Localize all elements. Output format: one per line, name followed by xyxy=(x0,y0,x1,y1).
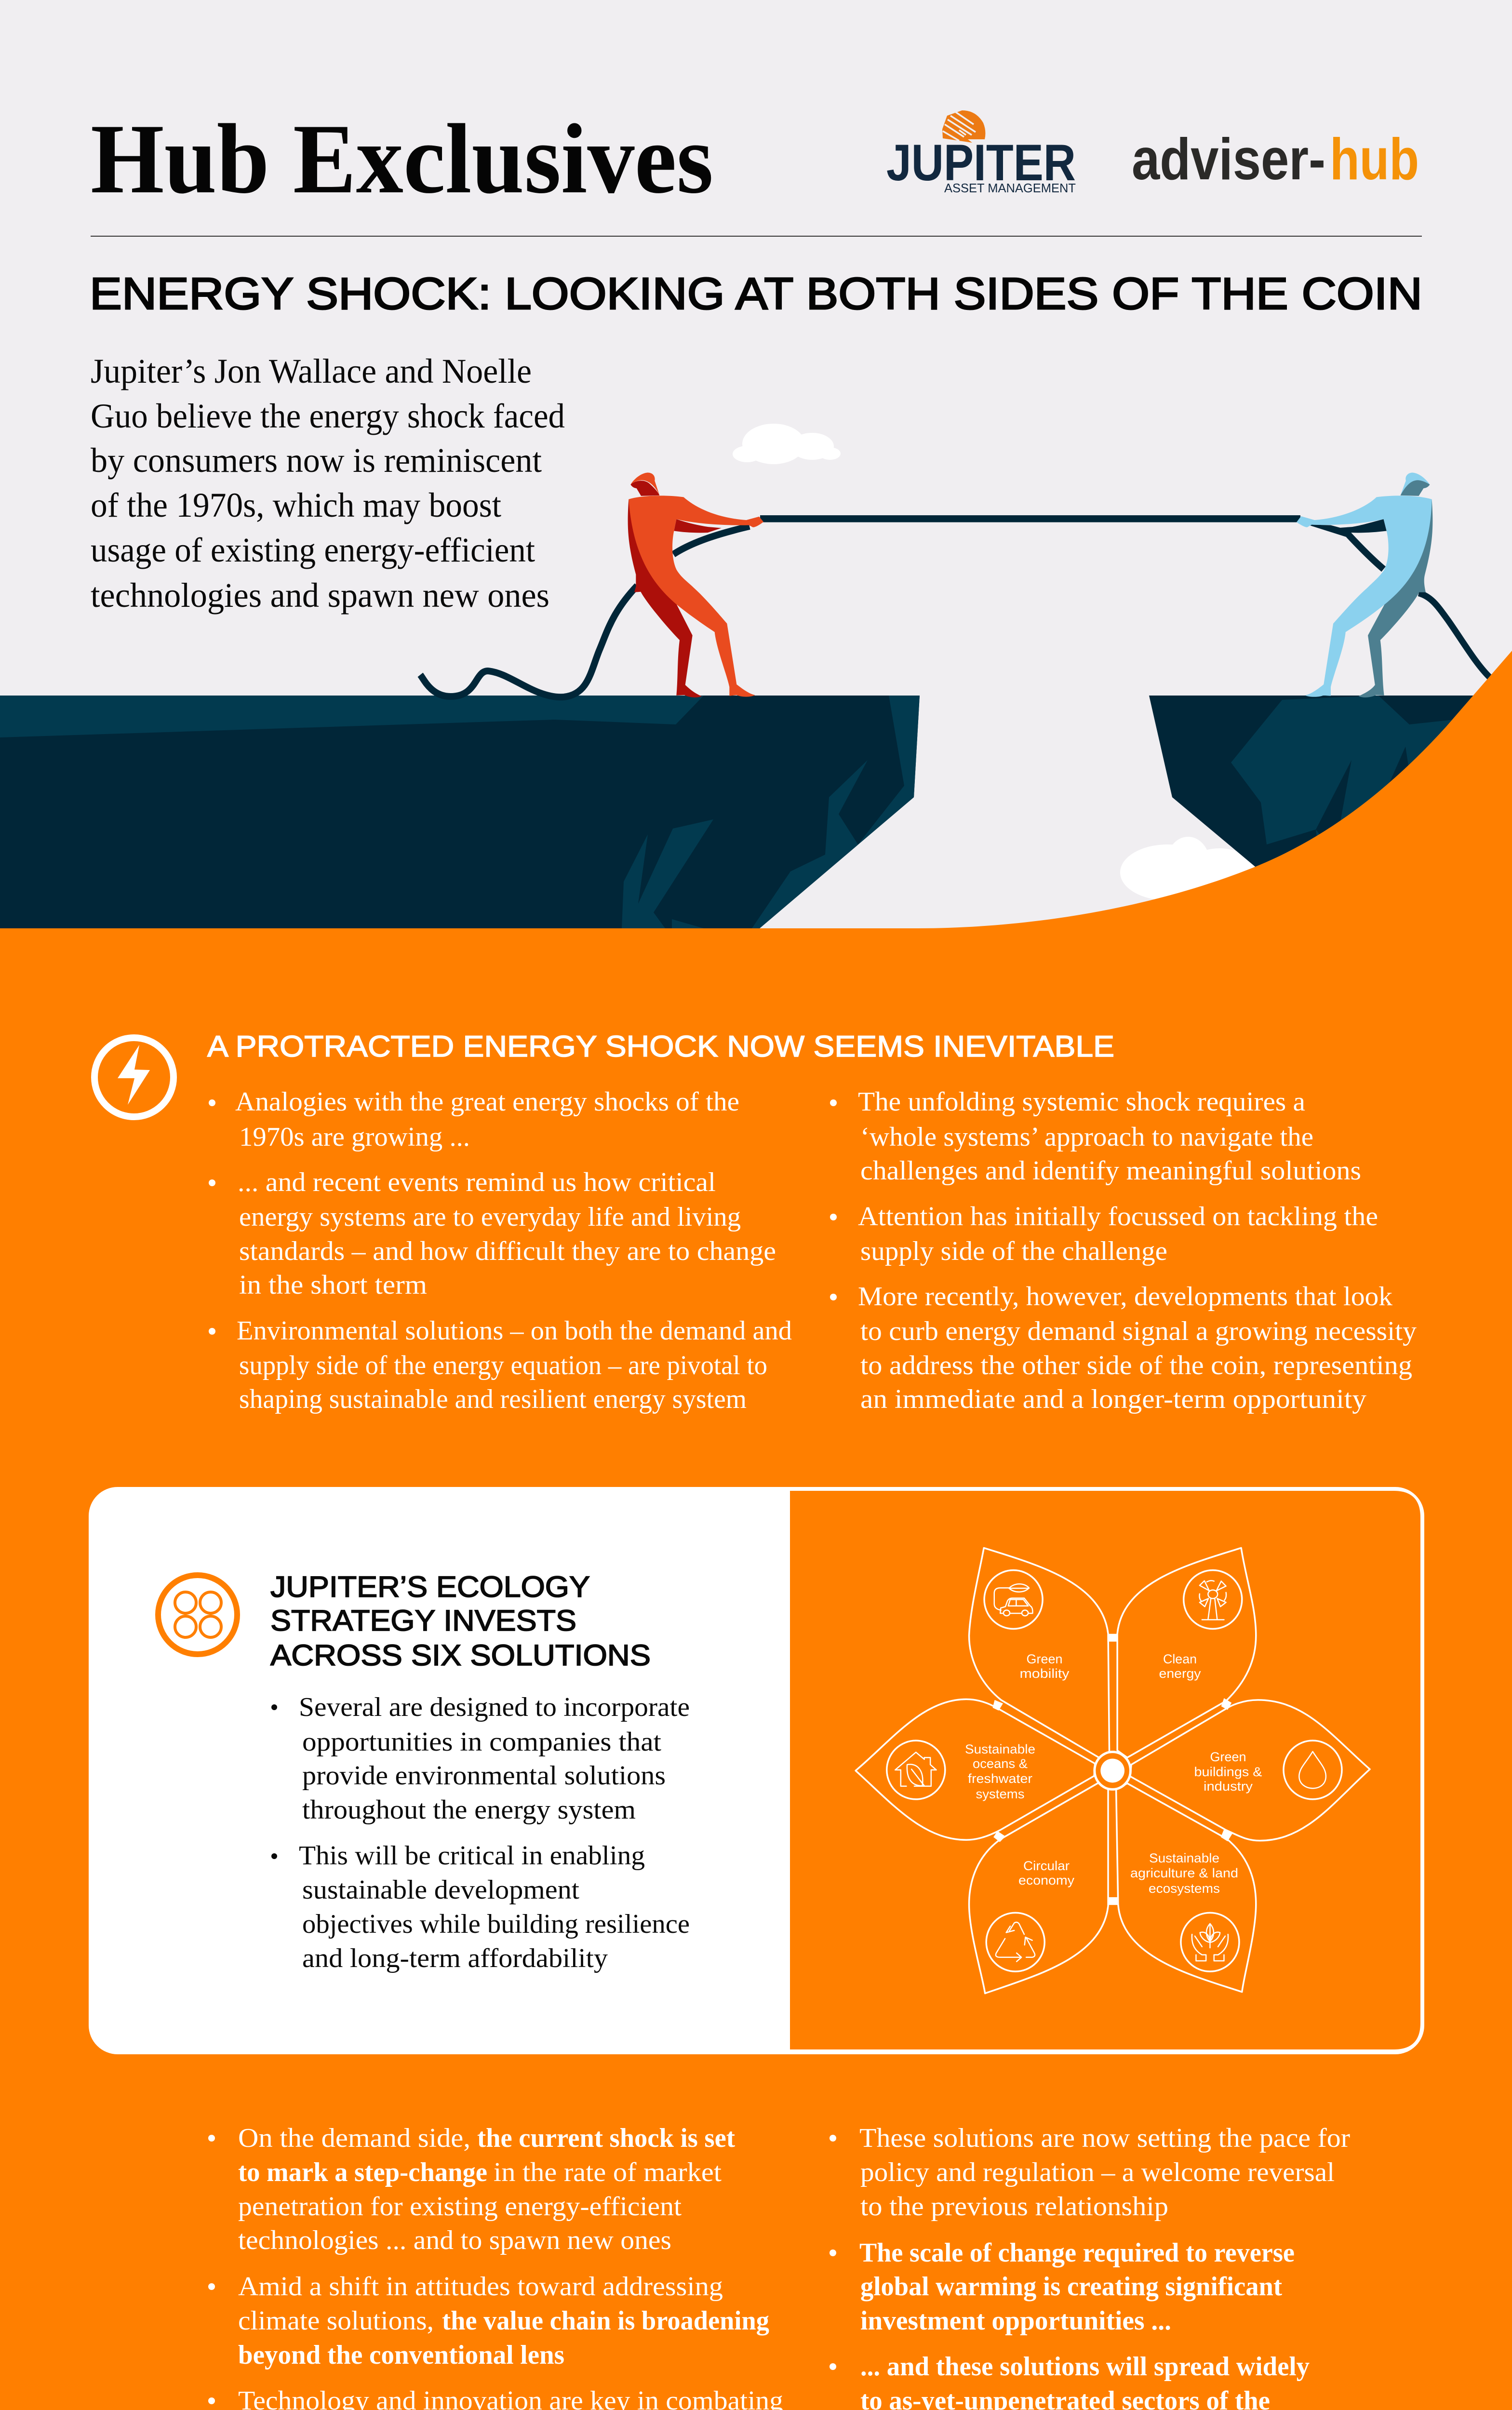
right bullet list: supply side of the challenge xyxy=(860,1236,1167,1266)
section heading: A PROTRACTED ENERGY SHOCK NOW SEEMS INEVITABLE xyxy=(207,1030,1114,1063)
right bullet list: to curb energy demand signal a growing necessity xyxy=(860,1316,1417,1346)
left bullet list: On the demand side, xyxy=(238,2123,470,2153)
intro text: usage of existing energy-efficient xyxy=(91,531,535,569)
label: sustainable oceans and freshwater systems: Sustainable xyxy=(965,1742,1035,1756)
label: circular economy: Circular xyxy=(1023,1859,1070,1873)
right cliff xyxy=(1149,696,1512,892)
icon: water drop xyxy=(1299,1752,1326,1788)
intro text: by consumers now is reminiscent xyxy=(91,441,542,480)
label: green mobility xyxy=(1020,1652,1070,1681)
label: sustainable oceans and freshwater systems: freshwater xyxy=(968,1771,1032,1786)
left cliff xyxy=(0,696,920,928)
label: green buildings and industry: Green xyxy=(1210,1750,1246,1764)
intro text xyxy=(91,352,565,615)
left bullet list: shaping sustainable and resilient energy system xyxy=(239,1384,747,1414)
icon: house with leaf xyxy=(895,1752,937,1786)
left bullet list: Environmental solutions – on both the demand and xyxy=(237,1316,792,1346)
card heading: JUPITER’S ECOLOGY xyxy=(270,1570,590,1603)
left bullet list: to mark a step-change xyxy=(238,2157,487,2187)
label: clean energy xyxy=(1159,1652,1201,1681)
label: green mobility: mobility xyxy=(1020,1666,1070,1681)
icon: wind turbine xyxy=(1199,1580,1226,1620)
panel: protracted energy shock xyxy=(94,1030,1417,1414)
left bullet list: 1970s are growing ... xyxy=(239,1122,470,1152)
card bullet list: opportunities in companies that xyxy=(302,1727,661,1757)
right bullet list: The scale of change required to reverse xyxy=(859,2238,1295,2268)
label: green mobility: Green xyxy=(1027,1652,1062,1666)
right bullet list: The unfolding systemic shock requires a xyxy=(858,1087,1305,1117)
intro text: Guo believe the energy shock faced xyxy=(91,397,565,435)
figure: left, orange xyxy=(628,473,763,697)
right bullet list: ... and these solutions will spread widely xyxy=(860,2352,1310,2382)
intro text: technologies and spawn new ones xyxy=(91,576,549,615)
left bullet list: Analogies with the great energy shocks of the xyxy=(235,1087,739,1117)
icon: recycle triangle xyxy=(996,1922,1035,1962)
left bullet list: in the rate of market xyxy=(494,2157,722,2187)
label: clean energy: Clean xyxy=(1163,1652,1197,1666)
panel: demand side bullets xyxy=(208,2123,1350,2410)
cloud: upper xyxy=(733,424,841,464)
title: Hub Exclusives xyxy=(91,104,713,214)
label: sustainable agriculture and land ecosystems: agriculture & land xyxy=(1130,1866,1238,1880)
label: sustainable oceans and freshwater systems xyxy=(965,1742,1035,1801)
card bullet list: sustainable development xyxy=(302,1875,579,1905)
diagram: six solutions flower xyxy=(856,1548,1370,1994)
card heading xyxy=(270,1570,651,1672)
cloud: lower xyxy=(1120,837,1256,900)
card heading: STRATEGY INVESTS xyxy=(270,1604,576,1637)
card bullet list: This will be critical in enabling xyxy=(299,1841,645,1871)
label: green buildings and industry: industry xyxy=(1204,1779,1253,1794)
card bullet list: and long-term affordability xyxy=(302,1943,608,1973)
left bullet list: energy systems are to everyday life and living xyxy=(239,1202,741,1232)
label: clean energy: energy xyxy=(1159,1666,1201,1681)
left bullet list: ... and recent events remind us how critical xyxy=(238,1167,716,1197)
left bullet list xyxy=(209,1087,792,1414)
logo: Jupiter Asset Management: JUPITER xyxy=(886,134,1076,191)
right bullet list: ‘whole systems’ approach to navigate the xyxy=(860,1122,1313,1152)
panel: Jupiter's ecology strategy card xyxy=(89,1487,1424,2054)
label: green buildings and industry: buildings & xyxy=(1194,1765,1262,1779)
left bullet list: standards – and how difficult they are to change xyxy=(239,1236,776,1266)
label: sustainable oceans and freshwater systems: oceans & xyxy=(973,1756,1028,1771)
logo: Jupiter Asset Management xyxy=(886,110,1076,195)
icon: four circles xyxy=(158,1575,237,1654)
logo: Jupiter Asset Management: ASSET MANAGEMENT xyxy=(944,181,1076,195)
intro text: Jupiter’s Jon Wallace and Noelle xyxy=(91,352,532,390)
left bullet list: technologies ... and to spawn new ones xyxy=(238,2225,671,2255)
right bullet list: to the previous relationship xyxy=(860,2192,1168,2222)
left bullet list: in the short term xyxy=(239,1270,427,1300)
left bullet list: the value chain is broadening xyxy=(442,2306,769,2336)
left bullet list: Amid a shift in attitudes toward addressing xyxy=(238,2272,723,2302)
logo: adviser-hub: hub xyxy=(1330,126,1419,192)
figure: right, blue xyxy=(1297,473,1490,697)
right bullet list: challenges and identify meaningful solutions xyxy=(860,1156,1361,1186)
right bullet list: investment opportunities ... xyxy=(860,2306,1171,2336)
petals and icons xyxy=(856,1548,1370,1994)
right bullet list: to address the other side of the coin, representing xyxy=(860,1351,1412,1380)
right bullet list: global warming is creating significant xyxy=(860,2272,1282,2302)
left bullet list: beyond the conventional lens xyxy=(238,2340,564,2370)
icon: lightning bolt xyxy=(94,1038,174,1117)
label: circular economy xyxy=(1018,1859,1075,1888)
label: green buildings and industry xyxy=(1194,1750,1262,1794)
label: sustainable agriculture and land ecosystems xyxy=(1130,1851,1238,1896)
label: sustainable agriculture and land ecosystems: ecosystems xyxy=(1149,1881,1220,1896)
label: circular economy: economy xyxy=(1018,1873,1075,1888)
left bullet list: penetration for existing energy-efficient xyxy=(238,2192,682,2222)
card bullet list: Several are designed to incorporate xyxy=(299,1692,690,1722)
right bullet list: These solutions are now setting the pace for xyxy=(859,2123,1350,2153)
right bullet list xyxy=(830,1087,1417,1414)
card heading: ACROSS SIX SOLUTIONS xyxy=(270,1639,651,1672)
card bullet list: throughout the energy system xyxy=(302,1795,636,1825)
right bullet list: an immediate and a longer-term opportunity xyxy=(860,1384,1366,1414)
left bullet list: climate solutions, xyxy=(238,2306,434,2336)
icon: hands holding plant xyxy=(1192,1924,1228,1961)
icon: car and leaf xyxy=(994,1584,1032,1616)
card bullet list xyxy=(271,1692,690,1973)
label: sustainable agriculture and land ecosystems: Sustainable xyxy=(1149,1851,1219,1865)
illustration: tug of war across a cliff gap xyxy=(0,424,1512,928)
card bullet list: objectives while building resilience xyxy=(302,1909,690,1939)
right bullet list: Attention has initially focussed on tackling the xyxy=(858,1202,1378,1232)
label: sustainable oceans and freshwater systems: systems xyxy=(976,1787,1025,1801)
orange background with curved edge xyxy=(0,651,1512,2410)
left bullet list: supply side of the energy equation – are pivotal to xyxy=(239,1351,767,1380)
left bullet list xyxy=(208,2123,783,2410)
logo: adviser-hub: adviser- xyxy=(1132,126,1325,192)
card bullet list: provide environmental solutions xyxy=(302,1761,666,1791)
right bullet list: More recently, however, developments that look xyxy=(858,1282,1392,1312)
right bullet list: policy and regulation – a welcome reversal xyxy=(860,2157,1335,2187)
rope xyxy=(420,515,1300,697)
right bullet list xyxy=(830,2123,1350,2410)
main heading: ENERGY SHOCK: LOOKING AT BOTH SIDES OF THE COIN xyxy=(90,268,1422,319)
intro text: of the 1970s, which may boost xyxy=(91,486,501,524)
left bullet list: the current shock is set xyxy=(477,2123,735,2153)
